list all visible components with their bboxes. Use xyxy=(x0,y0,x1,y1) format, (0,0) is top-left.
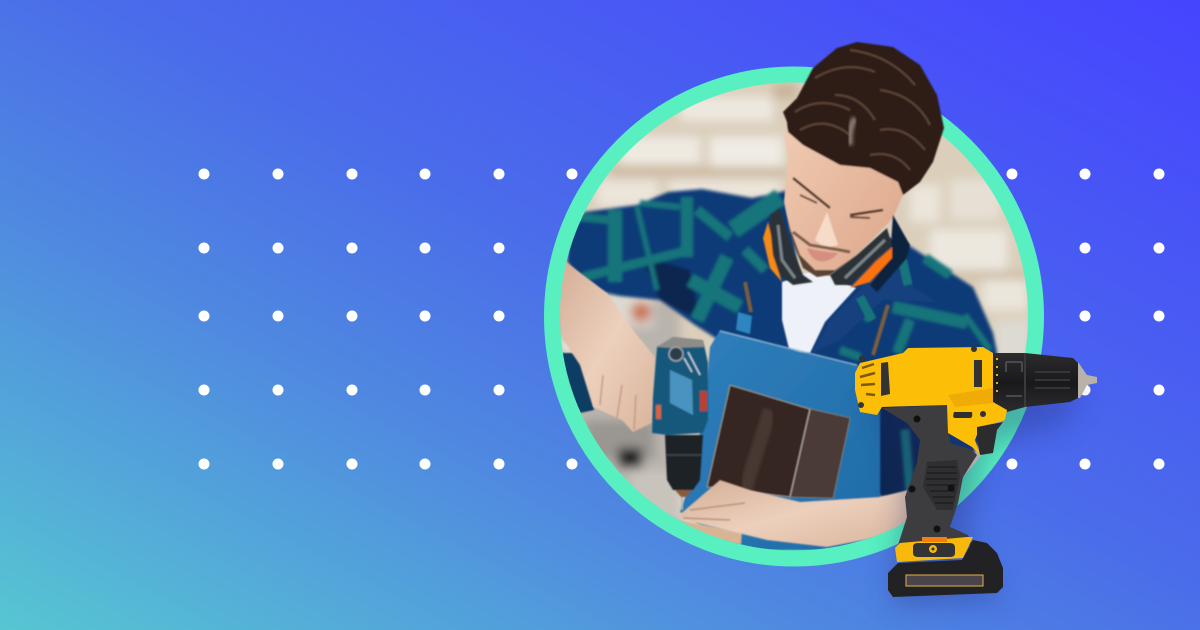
dark shirt folds xyxy=(640,255,930,497)
plaid shirt xyxy=(567,189,997,497)
dot grid left xyxy=(198,168,578,470)
collar plaid xyxy=(860,250,908,320)
chuck xyxy=(993,353,1078,412)
nose highlight xyxy=(815,212,838,248)
drill drop shadow xyxy=(860,385,1085,605)
blue power drill in hand xyxy=(652,337,708,510)
jaw beard xyxy=(786,212,857,277)
body shading xyxy=(948,388,993,407)
hair parting highlight xyxy=(850,118,855,145)
battery label xyxy=(906,575,983,586)
dot grid right xyxy=(1006,168,1164,470)
speed marks xyxy=(996,358,998,398)
left ear cup xyxy=(770,208,813,285)
circular photo of worker xyxy=(560,82,1028,550)
upper arm and gripping hand xyxy=(558,262,655,432)
battery collar xyxy=(895,537,973,562)
body slots xyxy=(881,360,982,396)
headphones around neck xyxy=(763,208,910,292)
brick wall background xyxy=(560,82,1028,380)
chuck tip xyxy=(1078,362,1097,398)
yellow body xyxy=(855,347,1007,455)
speed switch xyxy=(953,412,972,418)
grip ribs xyxy=(926,467,957,503)
brows and eyes xyxy=(793,178,883,215)
body vents xyxy=(860,364,875,395)
battery indicator xyxy=(922,537,947,542)
battery pack xyxy=(888,540,1003,597)
white t-shirt xyxy=(782,270,856,353)
apron xyxy=(680,312,880,550)
right ear cup xyxy=(830,228,892,285)
navy fabric under forearm xyxy=(560,353,594,413)
neck band xyxy=(870,215,910,292)
lower left blurred workshop xyxy=(560,288,683,522)
yellow cordless drill xyxy=(855,346,1097,597)
hair xyxy=(783,42,944,195)
grip screws xyxy=(908,416,954,532)
leather pocket xyxy=(707,385,850,498)
pistol grip xyxy=(882,405,977,545)
collar right xyxy=(812,237,937,353)
mint ring xyxy=(552,75,1036,558)
grip ribbed panel xyxy=(923,460,960,510)
trigger xyxy=(977,422,1003,455)
apron straps and clips xyxy=(745,282,888,355)
plaid stripes xyxy=(580,197,990,490)
battery release button xyxy=(913,543,955,557)
hair strands xyxy=(795,50,930,170)
man's head and hair breaking out of circle xyxy=(783,42,944,277)
lower hand and forearm xyxy=(677,480,908,547)
illustration scene xyxy=(198,41,1164,614)
face xyxy=(784,110,905,277)
moustache and lips xyxy=(793,232,850,252)
wood block xyxy=(677,520,742,545)
body screws xyxy=(858,346,986,417)
